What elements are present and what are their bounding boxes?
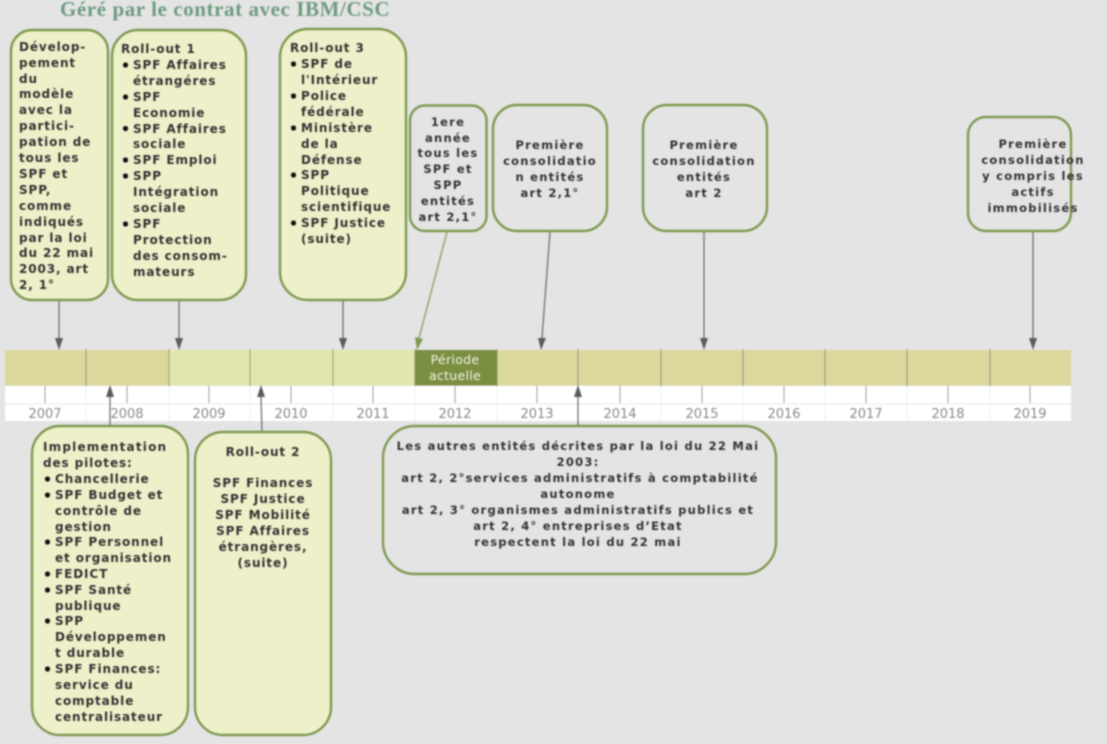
year scale: 2019 <box>1013 407 1047 422</box>
panel: roll-out 2: (suite) <box>238 556 288 570</box>
year scale: 2013 <box>520 407 554 422</box>
panel: implementation des pilotes: comptable <box>55 694 134 708</box>
callout: actifs immobilisés: immobilisés <box>987 201 1079 215</box>
arrow: up 2010 <box>257 385 265 432</box>
panel: implementation des pilotes: centralisateur <box>55 710 163 724</box>
arrow: 2015 <box>700 232 708 350</box>
callout: 1ere année: année <box>425 131 471 145</box>
arrow: 2013 <box>538 232 550 350</box>
panel: roll-out 3: Politique <box>301 184 370 198</box>
panel: roll-out 3: Police <box>301 89 347 103</box>
current period marker: actuelle <box>429 368 481 383</box>
callout: actifs immobilisés: Première <box>998 137 1068 151</box>
callout: actifs immobilisés: consolidation <box>981 153 1085 167</box>
panel: implementation des pilotes: Implementation <box>43 440 167 454</box>
panel: roll-out 3: SPF de <box>301 57 353 71</box>
panel: développement du modèle: 2003, art <box>19 262 89 276</box>
panel: implementation des pilotes: SPF Personnel <box>55 535 164 549</box>
year scale: 2010 <box>274 407 308 422</box>
current period marker: Période <box>431 352 479 367</box>
callout: 1ere année <box>410 106 486 231</box>
panel: implementation des pilotes: publique <box>55 599 121 613</box>
panel: implementation des pilotes: contrôle de <box>55 504 142 518</box>
panel: roll-out 3 <box>280 29 406 300</box>
year scale: 2014 <box>603 407 637 422</box>
panel: développement du modèle: SPF et <box>19 167 68 181</box>
callout: première consolidation art 2,1°: consolidatio <box>503 154 597 168</box>
panel: roll-out 1: sociale <box>133 137 186 151</box>
panel: développement du modèle: du 22 mai <box>19 246 94 260</box>
panel: développement du modèle: partici- <box>19 119 75 133</box>
callout: 1ere année: art 2,1° <box>418 210 478 224</box>
arrow: up 2013 <box>574 385 582 426</box>
panel: roll-out 3: Roll-out 3 <box>290 41 365 55</box>
panel: roll-out 1: Intégration <box>133 185 219 199</box>
callout: autres entités: 2003: <box>557 455 599 469</box>
panel: développement du modèle <box>11 30 108 300</box>
callout: première consolidation art 2: entités <box>677 170 731 184</box>
panel: roll-out 1: Roll-out 1 <box>121 42 196 56</box>
panel: roll-out 2: SPF Mobilité <box>215 508 311 522</box>
panel: roll-out 1 <box>112 30 246 300</box>
arrow: 2019 <box>1029 232 1037 350</box>
callout: première consolidation art 2: consolidation <box>652 154 756 168</box>
panel: roll-out 2 <box>195 432 331 735</box>
panel: roll-out 3: l'Intérieur <box>301 73 378 87</box>
callout: première consolidation art 2,1°: art 2,1° <box>520 186 580 200</box>
callout: autres entités: Les autres entités décrites par la loi du 22 Mai <box>397 439 759 453</box>
callout: autres entités: art 2, 4° entreprises d’Etat <box>473 519 683 533</box>
panel: implementation des pilotes: SPF Finances: <box>55 662 161 676</box>
callout: autres entités: autonome <box>540 487 616 501</box>
panel: développement du modèle: Dévelop- <box>19 40 86 54</box>
panel: roll-out 2: SPF Justice <box>221 492 305 506</box>
panel: développement du modèle: 2, 1° <box>19 278 55 292</box>
panel: roll-out 1: SPF Affaires <box>133 58 227 72</box>
panel: implementation des pilotes: SPP <box>55 614 84 628</box>
callout: actifs immobilisés: y compris les <box>982 169 1084 183</box>
year scale: 2015 <box>685 407 719 422</box>
panel: développement du modèle: SPP, <box>19 183 51 197</box>
callout: première consolidation art 2,1°: n entités <box>515 170 585 184</box>
callout: autres entités: art 2, 3° organismes administratifs publics et <box>402 503 754 517</box>
panel: roll-out 1: sociale <box>133 201 186 215</box>
panel: développement du modèle: par la loi <box>19 231 88 245</box>
year scale <box>5 386 1071 422</box>
arrow: 2011 <box>339 300 347 350</box>
panel: roll-out 3: Défense <box>301 153 363 167</box>
callout: première consolidation art 2: Première <box>669 138 739 152</box>
panel: roll-out 3: Ministère <box>301 121 373 135</box>
panel: roll-out 1: SPF <box>133 217 161 231</box>
panel: roll-out 1: SPF Affaires <box>133 122 227 136</box>
panel: implementation des pilotes: SPF Santé <box>55 583 132 597</box>
panel: roll-out 1: Protection <box>133 233 213 247</box>
year scale: 2012 <box>438 407 472 422</box>
panel: développement du modèle: avec la <box>19 103 73 117</box>
panel: implementation des pilotes: t durable <box>55 646 125 660</box>
panel: roll-out 1: mateurs <box>133 265 195 279</box>
callout: 1ere année: 1ere <box>431 115 465 129</box>
panel: implementation des pilotes: et organisation <box>55 551 172 565</box>
arrow: 2012 green <box>415 232 447 350</box>
callout: première consolidation art 2,1° <box>493 105 607 231</box>
arrow: up 2008 <box>106 385 114 426</box>
callout: 1ere année: tous les <box>417 146 479 160</box>
panel: développement du modèle: modèle <box>19 87 74 101</box>
arrow: 2009 <box>175 300 183 350</box>
panel: roll-out 3: SPF Justice <box>301 216 386 230</box>
year scale: 2017 <box>849 407 883 422</box>
panel: développement du modèle: tous les <box>19 151 79 165</box>
timeline bar <box>5 349 1071 386</box>
panel: développement du modèle: comme <box>19 199 72 213</box>
callout: autres entités: art 2, 2°services administratifs à comptabilité <box>401 471 759 485</box>
panel: roll-out 2: SPF Finances <box>213 476 313 490</box>
year scale: 2018 <box>931 407 965 422</box>
current period marker <box>415 350 497 386</box>
panel: roll-out 1: des consom- <box>133 249 228 263</box>
timeline <box>5 349 1071 422</box>
panel: roll-out 1: étrangéres <box>133 74 216 88</box>
callout: 1ere année: SPP <box>434 178 462 192</box>
panel: roll-out 1: SPF Emploi <box>133 153 218 167</box>
callout: autres entités: respectent la loi du 22 mai <box>474 535 682 549</box>
panel: roll-out 1: Economie <box>133 106 205 120</box>
panel: implementation des pilotes <box>32 426 188 735</box>
callout: première consolidation art 2: art 2 <box>685 186 723 200</box>
year scale: 2009 <box>192 407 226 422</box>
callout: 1ere année: entités <box>421 194 475 208</box>
panel: développement du modèle: pation de <box>19 135 91 149</box>
panel: roll-out 3: (suite) <box>301 232 352 246</box>
year scale: 2016 <box>767 407 801 422</box>
panel: développement du modèle: pement <box>19 56 76 70</box>
panel: roll-out 1: SPP <box>133 169 162 183</box>
panel: roll-out 3: SPP <box>301 168 330 182</box>
panel: implementation des pilotes: service du <box>55 678 134 692</box>
callout: actifs immobilisés <box>968 117 1085 231</box>
panel: implementation des pilotes: des pilotes: <box>43 456 133 470</box>
panel: implementation des pilotes: SPF Budget et <box>55 488 163 502</box>
panel: roll-out 2: SPF Affaires <box>216 524 310 538</box>
year scale: 2011 <box>356 407 390 422</box>
callout: autres entités <box>383 426 776 574</box>
year scale: 2008 <box>110 407 144 422</box>
panel: développement du modèle: indiqués <box>19 215 84 229</box>
callout: 1ere année: SPF et <box>423 162 473 176</box>
panel: implementation des pilotes: Développemen <box>55 630 167 644</box>
callout: première consolidation art 2,1°: Première <box>515 138 585 152</box>
arrow: 2007 <box>55 300 63 350</box>
year scale: 2007 <box>28 407 62 422</box>
panel: roll-out 2: étrangères, <box>219 540 307 554</box>
panel: roll-out 2: Roll-out 2 <box>226 445 300 459</box>
panel: développement du modèle: du <box>19 72 38 86</box>
callout: actifs immobilisés: actifs <box>1011 185 1055 199</box>
panel: implementation des pilotes: gestion <box>55 520 112 534</box>
panel: implementation des pilotes: Chancellerie <box>55 472 150 486</box>
panel: implementation des pilotes: FEDICT <box>55 567 108 581</box>
panel: roll-out 3: fédérale <box>301 105 365 119</box>
panel: roll-out 3: scientifique <box>301 200 391 214</box>
panel: roll-out 1: SPF <box>133 90 161 104</box>
callout: première consolidation art 2 <box>643 105 767 231</box>
panel: roll-out 3: de la <box>301 137 339 151</box>
